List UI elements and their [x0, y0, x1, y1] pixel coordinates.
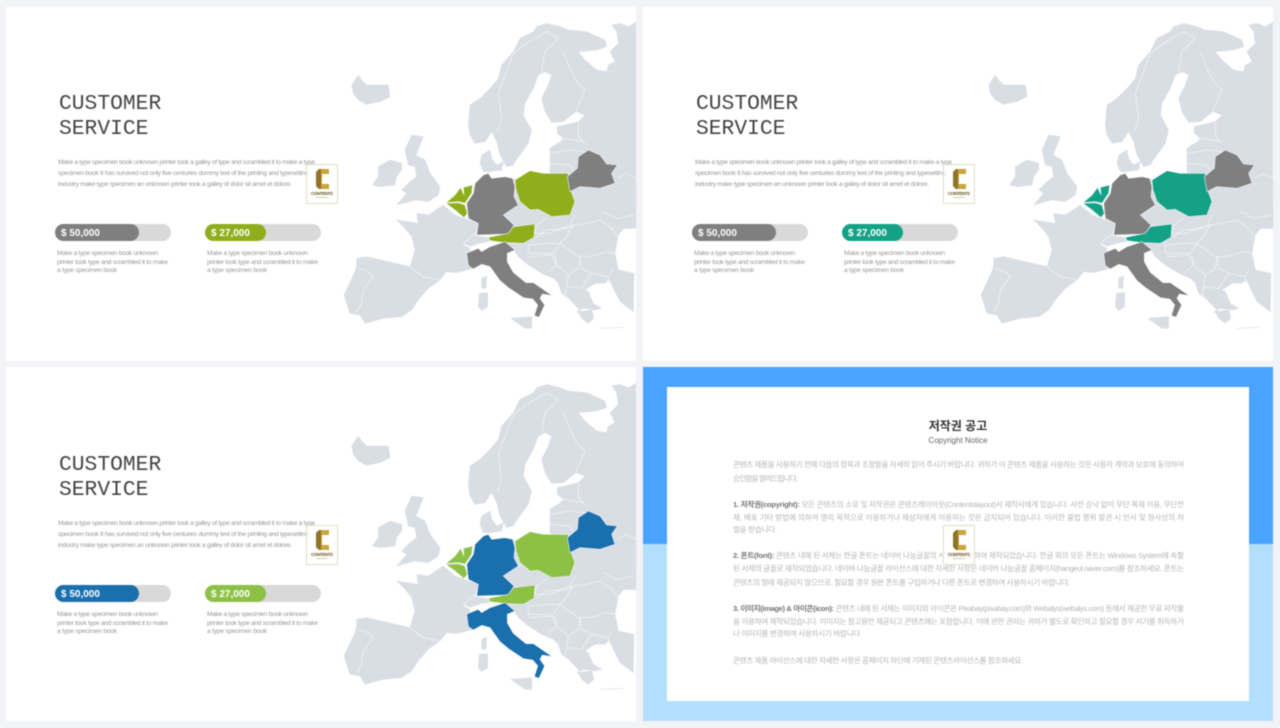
stat pill: $50,000: $ 50,000	[698, 228, 737, 239]
map: Europe with highlighted countries	[981, 22, 1273, 328]
heading: CUSTOMER	[59, 92, 161, 116]
caption: right stat: printer took type and scrambled it to make	[207, 620, 318, 627]
panel: blue and green map slide	[6, 367, 636, 721]
stat pill: $50,000: $ 50,000	[61, 228, 100, 239]
map: Europe with highlighted countries	[344, 22, 636, 328]
watermark logo	[944, 526, 974, 564]
caption: left stat: Make a type specimen book unknown	[694, 250, 795, 257]
heading: CUSTOMER	[696, 92, 798, 116]
caption: right stat: Make a type specimen book unknown	[207, 250, 308, 257]
text block: intro: 콘텐츠 제품을 사용하기 전에 다음의 항목과 조항들을 자세히 읽어 주시기 바랍니다. 귀하가 이 콘텐츠 제품을 사용하는 것은 사용자 계약과 보호에 동의하여	[733, 459, 1184, 469]
stat pill: $27,000: $ 27,000	[211, 228, 250, 239]
heading: copyright title: 저작권 공고	[929, 418, 987, 433]
text block: section 2: 콘텐츠의 형에 제공되지 않으므로, 필요할 경우 원본 폰트를 구입하거나 다른 폰트로 변경하여 사용하시기 바랍니다.	[733, 577, 1070, 587]
text block: description: industry make type specimen an unknown printer took a galley of dolor sit amet et dolore.	[58, 542, 292, 549]
caption: left stat: printer took type and scrambled it to make	[57, 259, 168, 266]
text block: section 1: 재, 배포 기타 방법에 의하여 영리 목적으로 이용하거나 제삼자에게 이용하는 것은 금지되어 있습니다. 이러한 불법 행위 발견 시 민사 및 형사상의 처	[733, 512, 1184, 522]
text block: section 2: 2. 폰트(font): 콘텐츠 내에 된 서체는 한글 폰트는 네이버 나눔글꼴의 서체를 사용하여 제작되었습니다. 한글 외의 모든 폰트는 Windows System에 속할	[733, 551, 1184, 560]
caption: left stat: a type specimen book	[57, 628, 118, 635]
text block: section 1: 1. 저작권(copyright): 모든 콘텐츠의 소유 및 저작권은 콘텐츠레이아웃(Contentslayout)사 제작사에게 있습니다. 사전 승낙 없이 무단 복제 이용, 무단전	[733, 500, 1184, 509]
text block: description: specimen book It has survived not only five centuries dummy text of the printing and typesetting	[58, 170, 309, 177]
watermark logo	[306, 526, 338, 564]
text block: description: industry make type specimen an unknown printer took a galley of dolor sit amet et dolore.	[58, 181, 292, 188]
caption: left stat: Make a type specimen book unknown	[57, 250, 158, 257]
stat pill: $27,000	[205, 224, 321, 241]
watermark logo	[944, 164, 974, 204]
caption: right stat: Make a type specimen book unknown	[844, 250, 945, 257]
caption: left stat: printer took type and scrambled it to make	[694, 259, 805, 266]
caption: right stat: Make a type specimen book unknown	[207, 611, 308, 618]
heading: SERVICE	[696, 117, 785, 141]
text block: section 3: 3. 이미지(image) & 아이콘(icon): 콘텐츠 내에 된 서체는 이미지와 아이콘은 Pixabay(pixabay.com)와 Webalys(webalys.com) 등에서 제공한 무료 저작물	[733, 604, 1184, 613]
stat pill: $50,000	[55, 224, 171, 241]
text block: intro: 승인함을 알려드립니다.	[733, 473, 798, 483]
heading: CUSTOMER	[59, 453, 161, 477]
caption: right stat: a type specimen book	[207, 628, 268, 635]
text block: section 3: 나 이미지를 변경하여 사용하시기 바랍니다.	[733, 628, 862, 638]
stat pill: $27,000	[205, 585, 321, 602]
text block: description: specimen book It has survived not only five centuries dummy text of the printing and typesetting	[695, 170, 946, 177]
panel: green and gray map slide	[6, 7, 636, 361]
stat pill: $27,000: $ 27,000	[211, 589, 250, 600]
panel: copyright notice	[643, 367, 1273, 721]
text block: section 2: 된 서체의 글꼴로 제작되었습니다. 네이버 나눔글꼴 라이선스에 대한 자세한 사항은 네이버 나눔글꼴 홈페이지(hangeul.naver.com)를 참조하세요. 폰트는	[733, 563, 1184, 573]
text block: description: Make a type specimen book unknown printer took a galley of type and scrambled it to make a type	[58, 159, 315, 166]
caption: right stat: a type specimen book	[844, 267, 905, 274]
map: Europe with highlighted countries	[344, 383, 636, 689]
text block: closing note: 콘텐츠 제품 라이선스에 대한 자세한 사항은 홈페이지 하단에 기재된 콘텐츠라이선스를 참조하세요.	[733, 655, 1023, 665]
caption: right stat: printer took type and scrambled it to make	[844, 259, 955, 266]
caption: left stat: a type specimen book	[694, 267, 755, 274]
text block: description: industry make type specimen an unknown printer took a galley of dolor sit amet et dolore.	[695, 181, 929, 188]
caption: left stat: a type specimen book	[57, 267, 118, 274]
text block: section 3: 을 이용하여 제작되었습니다. 이미지는 참고용만 제공되고 콘텐츠에는 포함합니다. 이에 관한 권리는 귀하가 별도로 확인하고 필요할 경우 서기를 취득하거	[733, 616, 1184, 626]
caption: left stat: printer took type and scrambled it to make	[57, 620, 168, 627]
stat pill: $27,000: $ 27,000	[848, 228, 887, 239]
text block: description: Make a type specimen book unknown printer took a galley of type and scrambled it to make a type	[58, 520, 315, 527]
text block: description: specimen book It has survived not only five centuries dummy text of the printing and typesetting	[58, 531, 309, 538]
subheading: Copyright Notice	[928, 436, 988, 445]
stat pill: $27,000	[842, 224, 958, 241]
caption: left stat: Make a type specimen book unknown	[57, 611, 158, 618]
stat pill: $50,000: $ 50,000	[61, 589, 100, 600]
watermark logo	[306, 164, 338, 204]
panel: teal and gray map slide	[643, 7, 1273, 361]
caption: right stat: a type specimen book	[207, 267, 268, 274]
heading: SERVICE	[59, 117, 148, 141]
stat pill: $50,000	[55, 585, 171, 602]
caption: right stat: printer took type and scrambled it to make	[207, 259, 318, 266]
stat pill: $50,000	[692, 224, 808, 241]
text block: description: Make a type specimen book unknown printer took a galley of type and scrambled it to make a type	[695, 159, 952, 166]
text block: section 1: 벌을 받습니다.	[733, 524, 777, 534]
heading: SERVICE	[59, 478, 148, 502]
